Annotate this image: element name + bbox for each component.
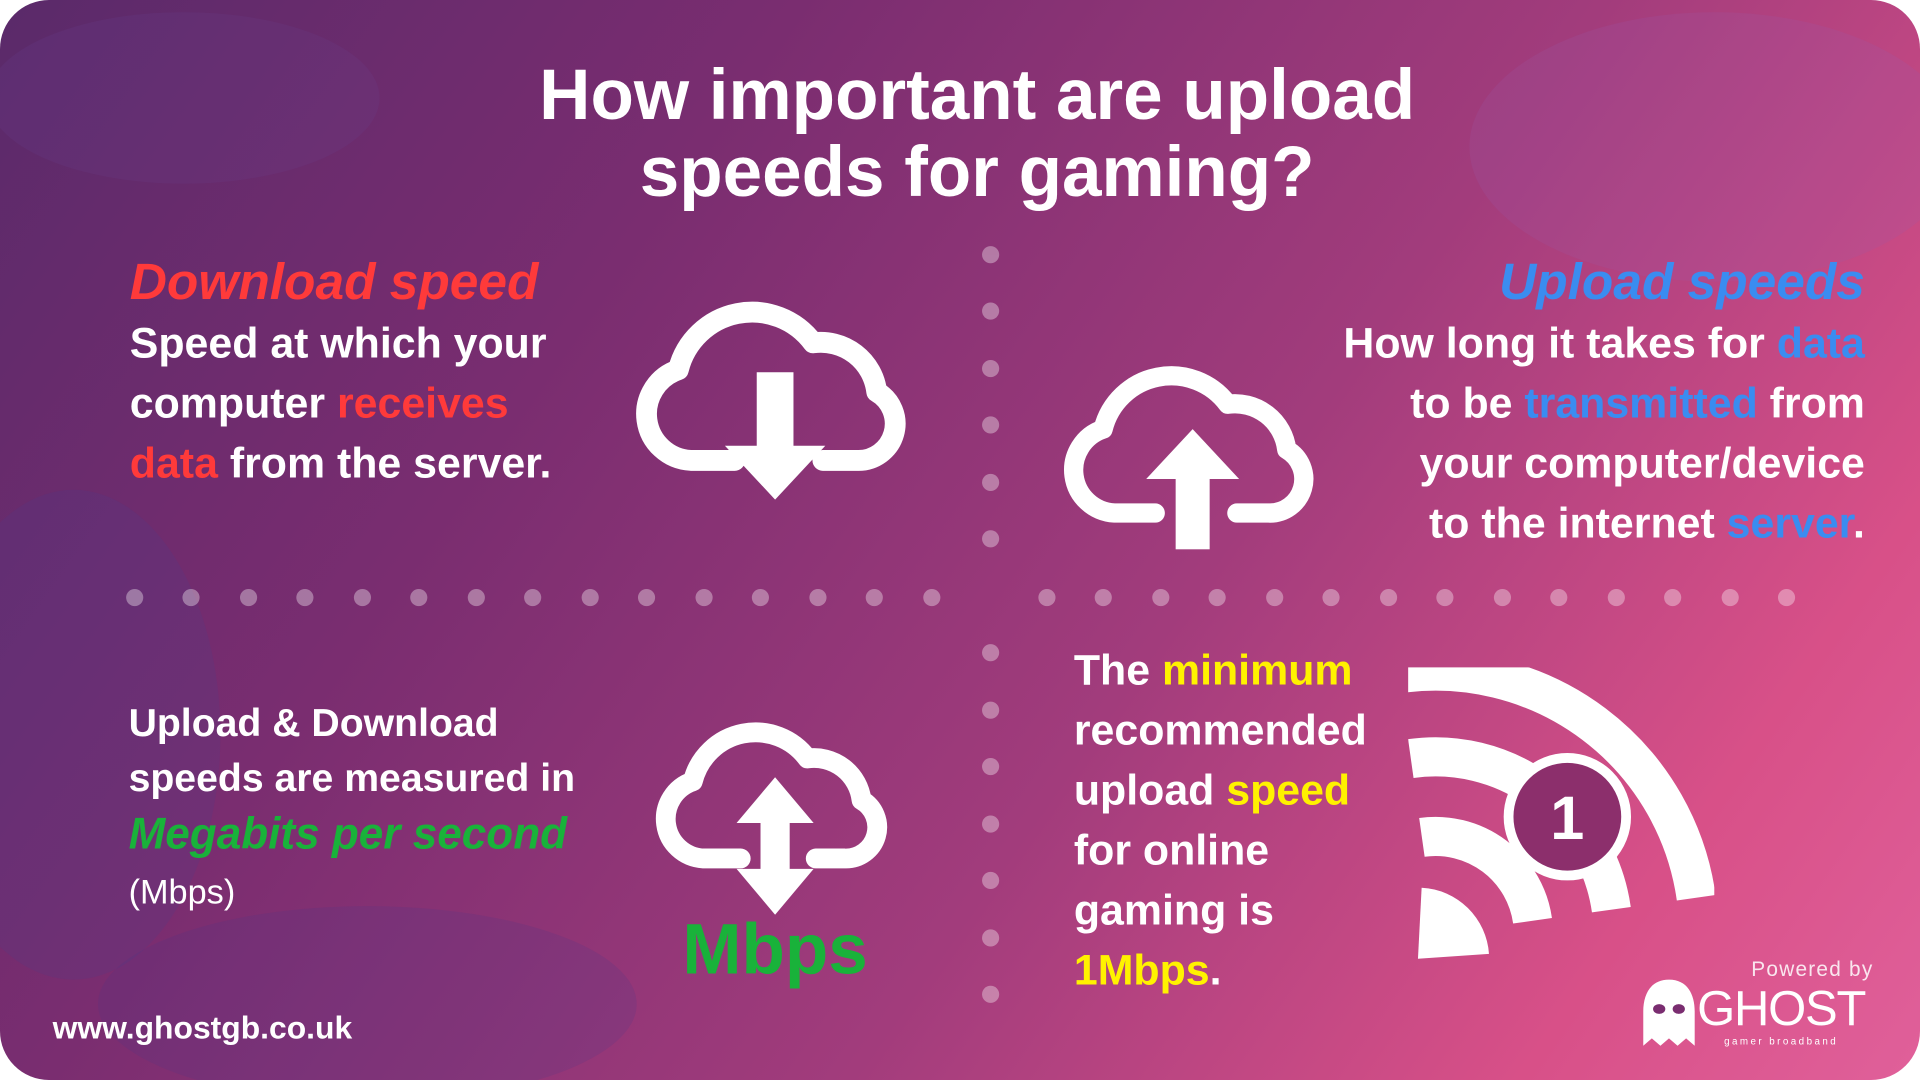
logo [1643, 958, 1873, 1047]
panel: download text [130, 252, 551, 487]
panel: upload text: your computer/device [1420, 440, 1865, 487]
icon: wifi 1 [1408, 667, 1714, 959]
panel: minimum text: for online [1074, 827, 1269, 874]
title: How important are upload [539, 55, 1415, 135]
panel: units text: speeds are measured in [129, 756, 575, 800]
panel: units text [129, 700, 575, 911]
icon: Mbps cloud [656, 722, 888, 989]
panel: upload text: Upload speeds [1499, 252, 1865, 310]
panel: minimum text: The minimum [1074, 647, 1352, 694]
panel: minimum text: gaming is [1074, 887, 1274, 934]
panel: minimum text: recommended [1074, 707, 1367, 754]
url: www.ghostgb.co.uk [53, 1009, 352, 1046]
icon: download cloud [636, 302, 906, 500]
panel: minimum text [1074, 647, 1367, 994]
logo: Powered by [1751, 958, 1873, 981]
icon: wifi 1: 1 [1550, 784, 1584, 852]
panel: download text: Speed at which your [130, 320, 547, 367]
panel: minimum text: upload speed [1074, 767, 1350, 814]
panel: upload text: to be transmitted from [1410, 380, 1865, 427]
title: speeds for gaming? [640, 132, 1315, 212]
panel: download text: data from the server. [130, 440, 551, 487]
panel: upload text [1343, 252, 1866, 547]
panel: download text: Download speed [130, 252, 538, 310]
panel: minimum text: 1Mbps. [1074, 947, 1222, 994]
title [539, 55, 1415, 212]
icon: upload cloud [1064, 366, 1314, 550]
panel: units text: (Mbps) [129, 873, 235, 911]
logo: gamer broadband [1724, 1036, 1838, 1047]
panel: units text: Upload & Download [129, 700, 499, 744]
panel: units text: Megabits per second [129, 808, 567, 858]
panel: upload text: How long it takes for data [1343, 320, 1865, 367]
panel: upload text: to the internet server. [1429, 500, 1865, 547]
icon: Mbps cloud: Mbps [682, 910, 868, 989]
panel: download text: computer receives [130, 380, 509, 427]
logo: GHOST [1697, 982, 1865, 1036]
